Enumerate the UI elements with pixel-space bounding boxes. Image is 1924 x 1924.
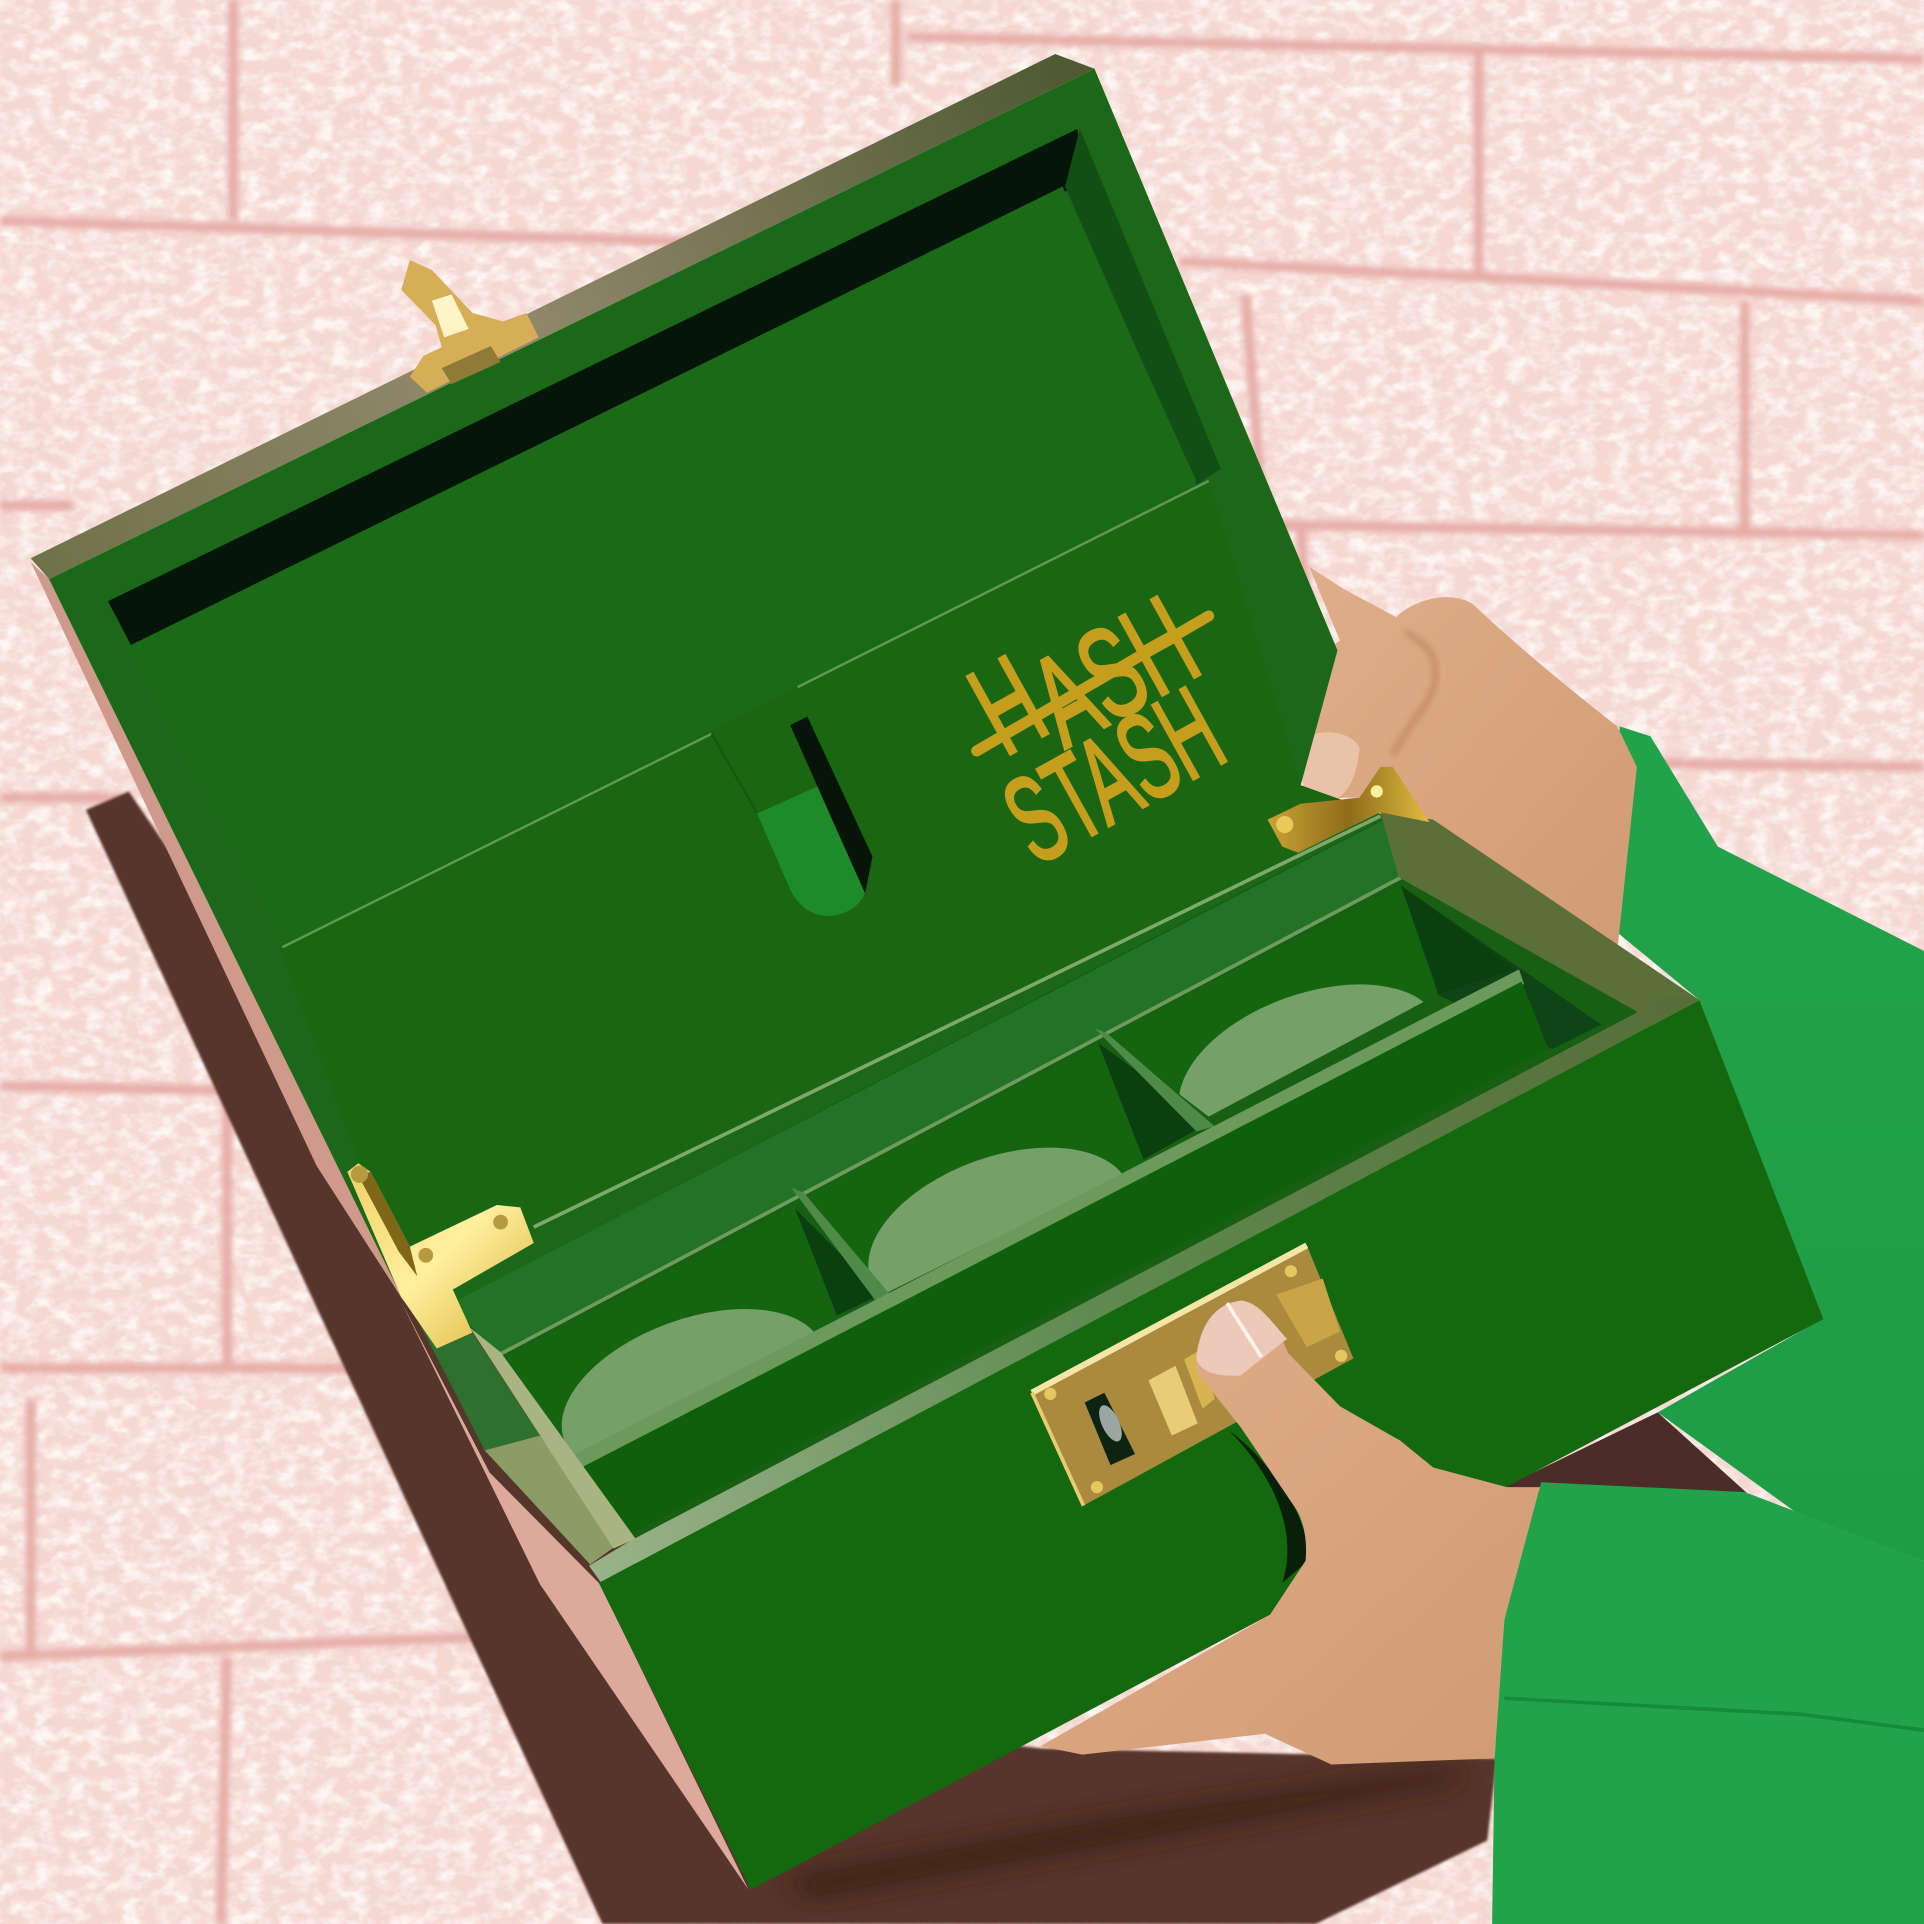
lock keyhole slot bbox=[1085, 1393, 1135, 1465]
logo word: HASH bbox=[948, 550, 1220, 801]
shadow under thumb bbox=[1229, 1431, 1308, 1583]
back rim of the base bbox=[452, 816, 1401, 1356]
right inner wall of lid bbox=[1065, 129, 1221, 485]
long front tray bbox=[577, 982, 1549, 1534]
lower lid panel bbox=[280, 481, 1387, 1301]
compartment one bbox=[562, 1309, 814, 1454]
lid frame bbox=[49, 69, 1387, 1307]
dark compartment corners bbox=[795, 886, 1515, 1315]
gold Hash Stash logo bbox=[948, 550, 1245, 890]
black gap behind the lid insert bbox=[108, 129, 1086, 648]
left brass hinge bbox=[347, 1163, 534, 1349]
lock dial one bbox=[1149, 1366, 1198, 1436]
dark gap between box and cuff bbox=[1503, 1412, 1749, 1495]
open lid bbox=[31, 54, 1387, 1307]
left side strip bbox=[417, 1319, 636, 1564]
combination lock plate bbox=[1032, 1245, 1353, 1506]
finger notch bbox=[712, 717, 872, 916]
lock dial two bbox=[1184, 1350, 1215, 1409]
logo word: HASH: ASH bbox=[1008, 570, 1220, 774]
front face of the base bbox=[599, 1000, 1823, 1890]
green coat upper sleeve bbox=[1610, 726, 1924, 1561]
rim of the base front bbox=[589, 996, 1699, 1583]
tray dividers bbox=[791, 1188, 893, 1303]
pink reflective outer side of the box bbox=[31, 562, 748, 1890]
lid outer top edge bbox=[31, 54, 1095, 579]
green coat cuff bbox=[1492, 1482, 1924, 1924]
hand gripping the lid from behind bbox=[1302, 567, 1637, 951]
top brass clasp bbox=[401, 260, 539, 393]
open box base bbox=[417, 812, 1823, 1890]
thumb nail bbox=[1196, 1301, 1287, 1376]
compartment three bbox=[1179, 902, 1439, 1116]
compartment two bbox=[868, 1148, 1122, 1292]
logo word: HASH: H bbox=[948, 629, 1067, 782]
upper lid insert panel bbox=[130, 187, 1196, 945]
right brass hinge bbox=[1268, 767, 1430, 853]
right interior wall bbox=[1380, 812, 1699, 1012]
logo word: STASH: STASH bbox=[983, 662, 1245, 890]
base interior bbox=[452, 816, 1638, 1541]
front hand holding the box bbox=[1041, 1301, 1546, 1764]
lock upper window bbox=[1276, 1279, 1340, 1347]
box shadow on the wall bbox=[86, 791, 1497, 1924]
